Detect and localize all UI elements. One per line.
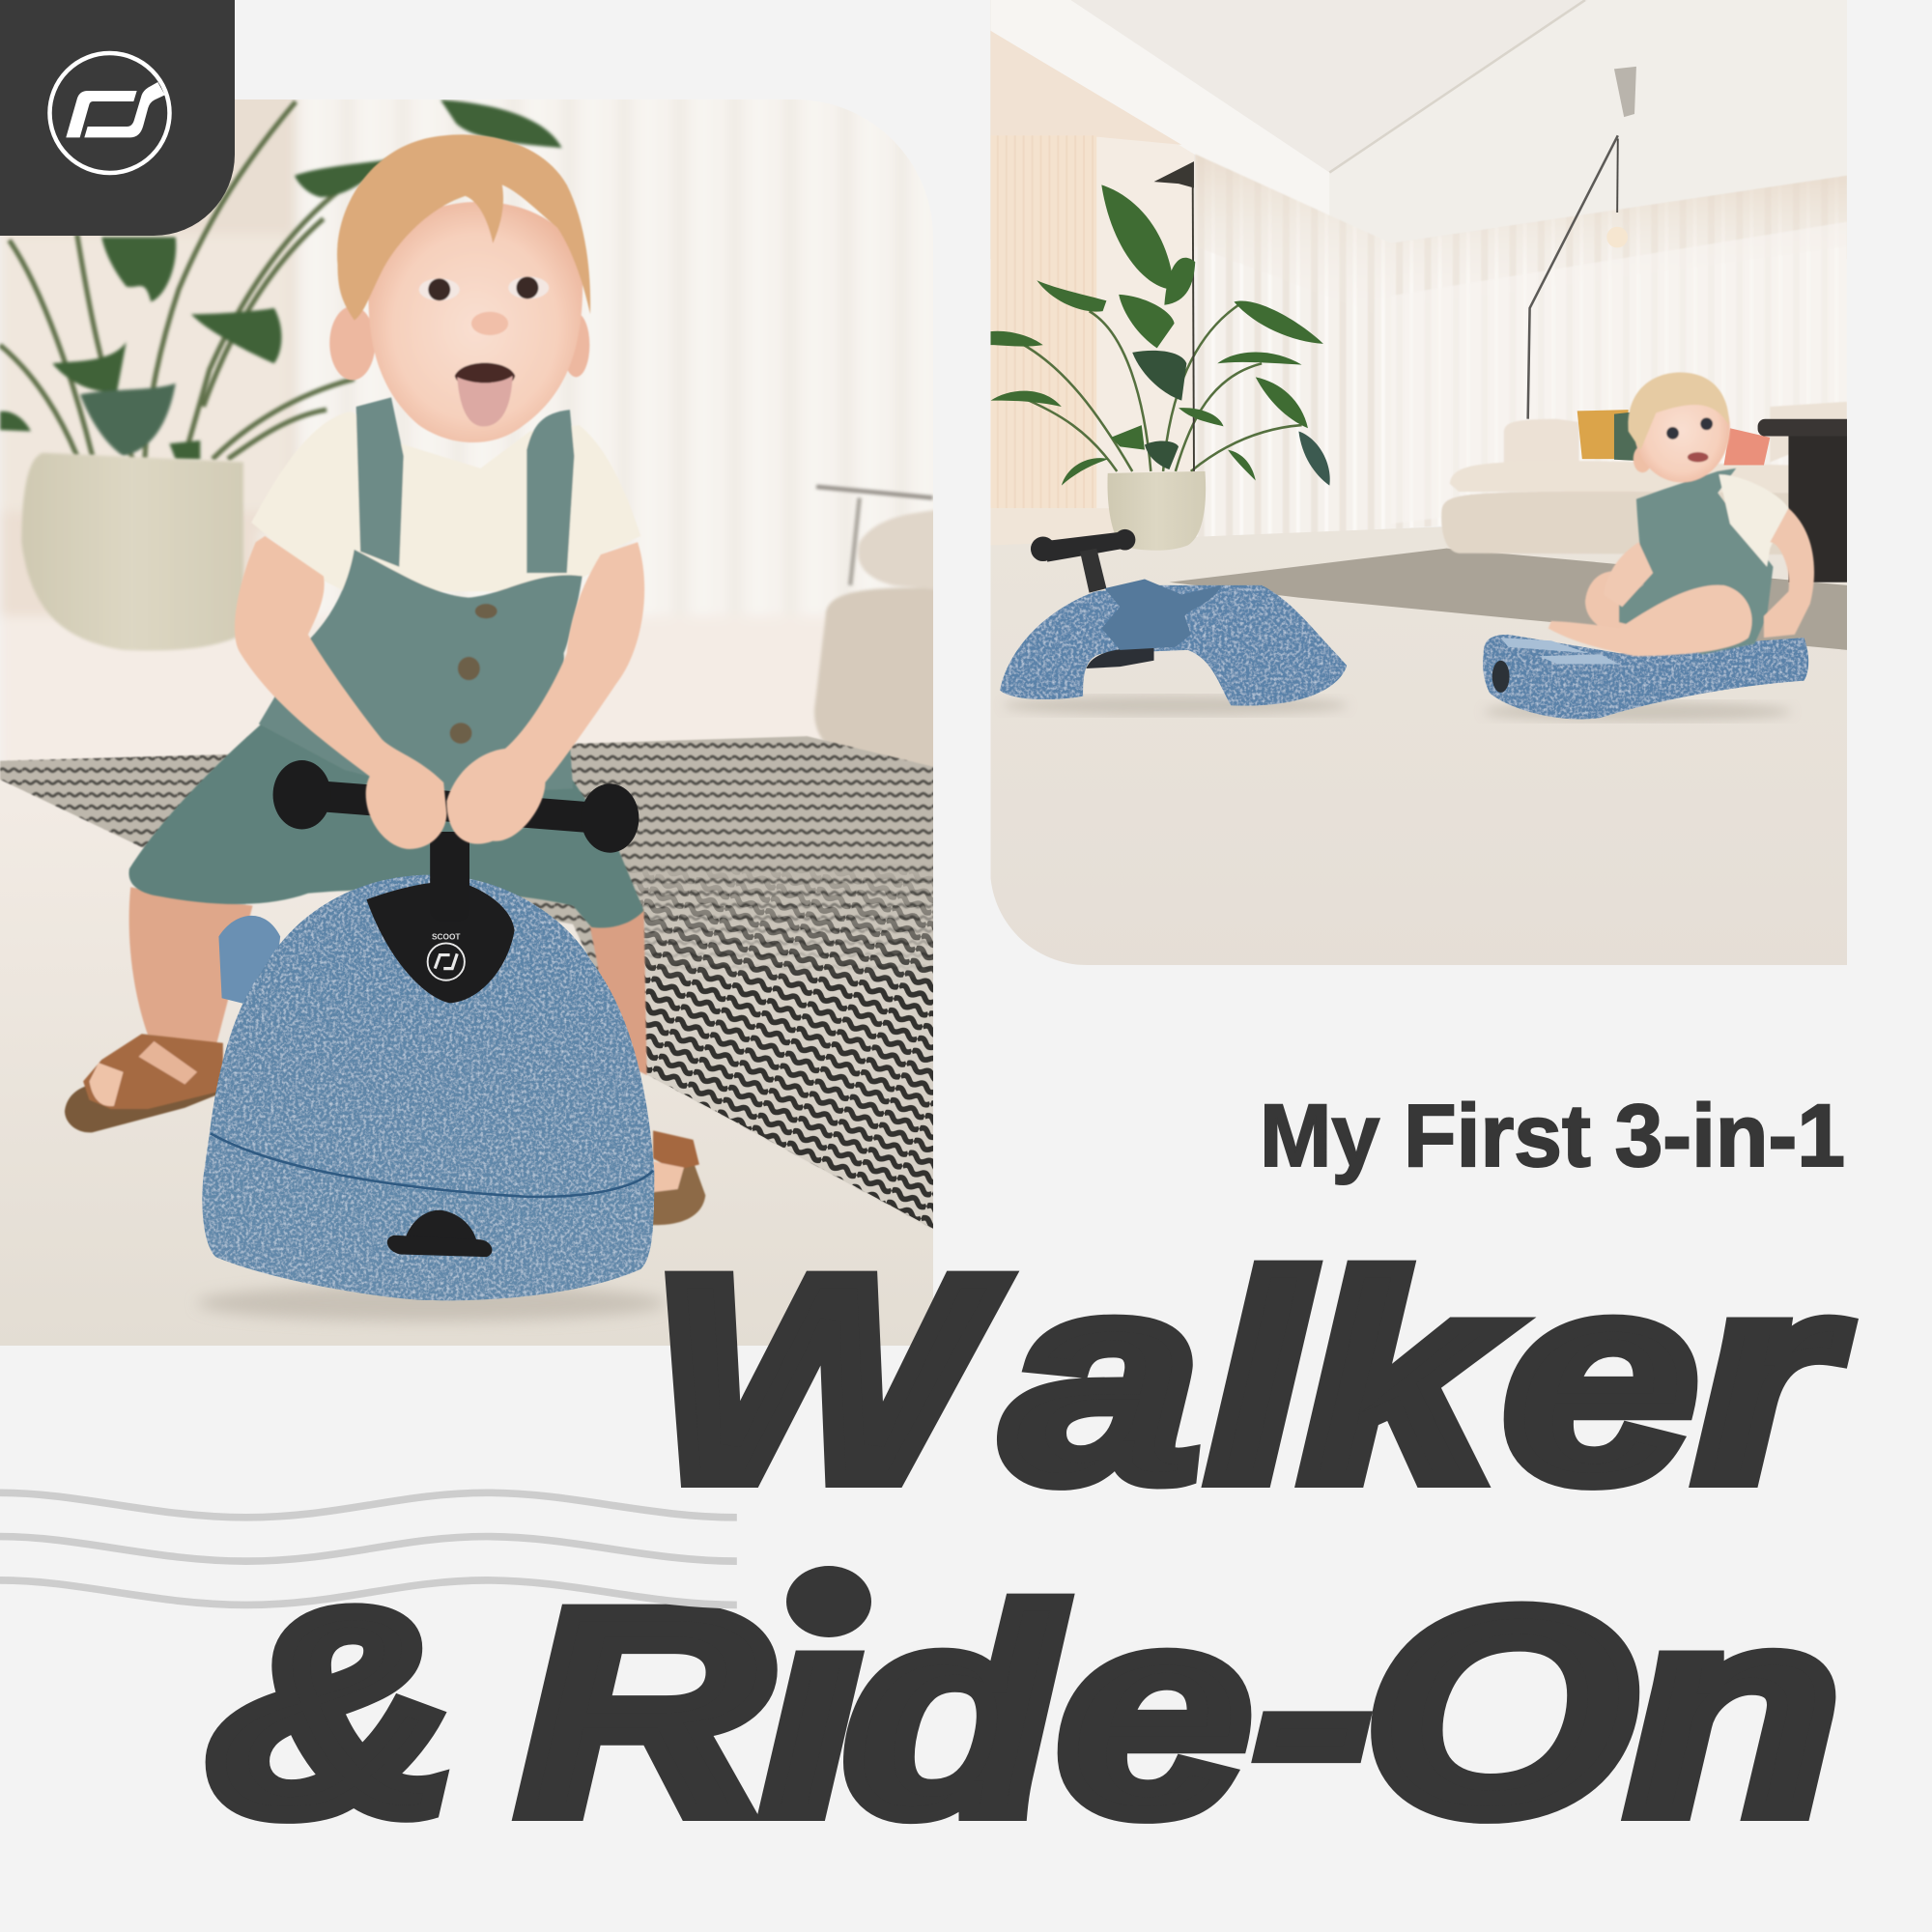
black side table — [1758, 419, 1860, 582]
wave lines — [0, 1492, 737, 1605]
walker floor shadow — [1003, 696, 1348, 715]
curtains — [1195, 154, 1847, 542]
lamp — [1528, 67, 1636, 419]
overall straps — [356, 397, 574, 573]
black triangle plate — [366, 881, 515, 1003]
dome floor shadow — [197, 1285, 666, 1321]
overalls — [1619, 469, 1774, 654]
dome seam — [211, 1134, 653, 1197]
hair — [337, 134, 590, 321]
eyes and mouth — [1666, 417, 1713, 462]
soffit — [991, 0, 1329, 238]
plant — [0, 99, 562, 460]
left arm — [235, 536, 446, 849]
handle stem — [430, 832, 469, 885]
toddler upper body — [128, 397, 644, 928]
walker handle — [1031, 529, 1135, 593]
eyes — [419, 276, 549, 300]
plant leaves — [991, 185, 1330, 486]
logo badge — [0, 0, 235, 236]
ride-on handle slot — [387, 1210, 492, 1257]
walker cross plate — [1101, 580, 1222, 650]
left leg — [129, 887, 252, 1047]
sofa cushions — [1577, 410, 1770, 466]
ceiling groove — [1329, 0, 1585, 173]
wall bracket — [1154, 161, 1194, 188]
sofa — [1441, 402, 1847, 554]
nose — [471, 312, 508, 335]
far thigh — [1585, 571, 1644, 635]
walker arch body — [1000, 585, 1347, 706]
leg — [1548, 585, 1752, 656]
walker underside — [1086, 648, 1154, 668]
mouth and tongue — [455, 363, 515, 426]
ear — [1634, 445, 1652, 472]
deck slot — [1492, 661, 1510, 693]
subtitle: My First 3-in-1 — [1260, 1087, 1845, 1185]
overall bib — [259, 550, 582, 795]
floor — [0, 794, 933, 1346]
rug — [1169, 549, 1847, 650]
toddler arms and head — [235, 134, 644, 849]
title line 1: Walker — [650, 1217, 1847, 1541]
shirt — [251, 412, 640, 591]
sofa — [813, 483, 933, 767]
seated toddler — [1548, 373, 1814, 656]
plant pot — [1107, 471, 1206, 551]
plate logo: SCOOT — [432, 932, 460, 942]
ceiling — [966, 0, 1860, 259]
striped wall panel — [991, 135, 1096, 508]
photo: room with disassembled walker — [966, 0, 1860, 985]
ride-on dome — [202, 875, 654, 1300]
right leg — [588, 909, 647, 1075]
plant stems — [1012, 185, 1302, 471]
lower ceiling right — [1329, 0, 1847, 243]
right arm — [446, 542, 644, 844]
pot — [21, 453, 243, 650]
sandal left — [65, 1034, 223, 1132]
left wall — [991, 31, 1195, 542]
arm left — [1604, 542, 1653, 607]
plate logo — [428, 932, 465, 980]
deck board — [1483, 635, 1808, 719]
ears — [329, 306, 589, 381]
deck grip strips — [1501, 638, 1619, 665]
face — [368, 202, 582, 442]
arm right — [1764, 508, 1814, 638]
icon: brand mark — [50, 53, 170, 173]
hair — [1628, 373, 1729, 450]
shorts — [128, 721, 644, 928]
rear part of ride-on — [218, 916, 280, 1010]
sandal right — [650, 1130, 705, 1225]
photo: toddler on ride-on — [0, 99, 933, 1346]
rug far — [0, 736, 933, 1229]
shirt — [1719, 474, 1788, 567]
deck floor shadow — [1484, 701, 1792, 722]
head — [1634, 374, 1730, 482]
title line 2: & Ride-On — [208, 1550, 1840, 1874]
rug near — [630, 869, 933, 1229]
background room — [0, 99, 909, 760]
floor — [991, 526, 1847, 985]
overall buttons — [450, 604, 497, 744]
handlebar — [273, 760, 639, 853]
letter i dot reshaping — [786, 1566, 883, 1642]
